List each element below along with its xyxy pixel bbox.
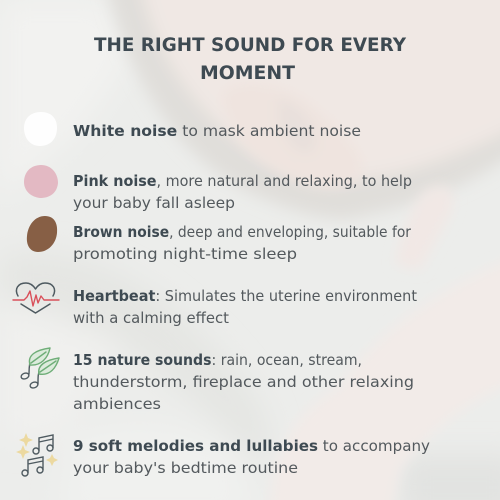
text: nature sounds: thunderstorm, fireplace and other relaxing xyxy=(73,373,414,391)
text: pink noise xyxy=(73,172,412,212)
text: melodies xyxy=(73,437,430,477)
text: melodies: your baby's bedtime routine xyxy=(73,459,298,477)
text: melodies: 9 soft melodies and lullabies to accompany xyxy=(73,437,430,455)
text: brown noise: promoting night-time sleep xyxy=(73,245,297,263)
text: white noise: White noise to mask ambient noise xyxy=(73,122,361,140)
text: pink noise: your baby fall asleep xyxy=(73,194,235,212)
icon: heartbeat xyxy=(13,283,59,313)
icon: melodies xyxy=(16,433,58,476)
icon: white noise blob xyxy=(24,112,57,146)
text: nature sounds xyxy=(73,351,414,413)
text: brown noise xyxy=(73,223,412,263)
icon: nature sounds xyxy=(20,348,59,389)
text: nature sounds: 15 nature sounds: rain, ocean, stream, xyxy=(73,351,362,369)
text: nature sounds: ambiences xyxy=(73,395,161,413)
icon: brown noise blob xyxy=(27,216,57,252)
title: MOMENT xyxy=(200,62,295,84)
text: heartbeat: with a calming effect xyxy=(73,309,229,327)
title xyxy=(94,34,406,84)
text: brown noise: Brown noise, deep and enveloping, suitable for xyxy=(73,223,412,241)
text: pink noise: Pink noise, more natural and relaxing, to help xyxy=(73,172,412,190)
title: THE RIGHT SOUND FOR EVERY xyxy=(94,34,406,56)
text: heartbeat: Heartbeat: Simulates the uterine environment xyxy=(73,287,417,305)
icon: pink noise blob xyxy=(24,165,58,198)
text: heartbeat xyxy=(73,287,417,327)
